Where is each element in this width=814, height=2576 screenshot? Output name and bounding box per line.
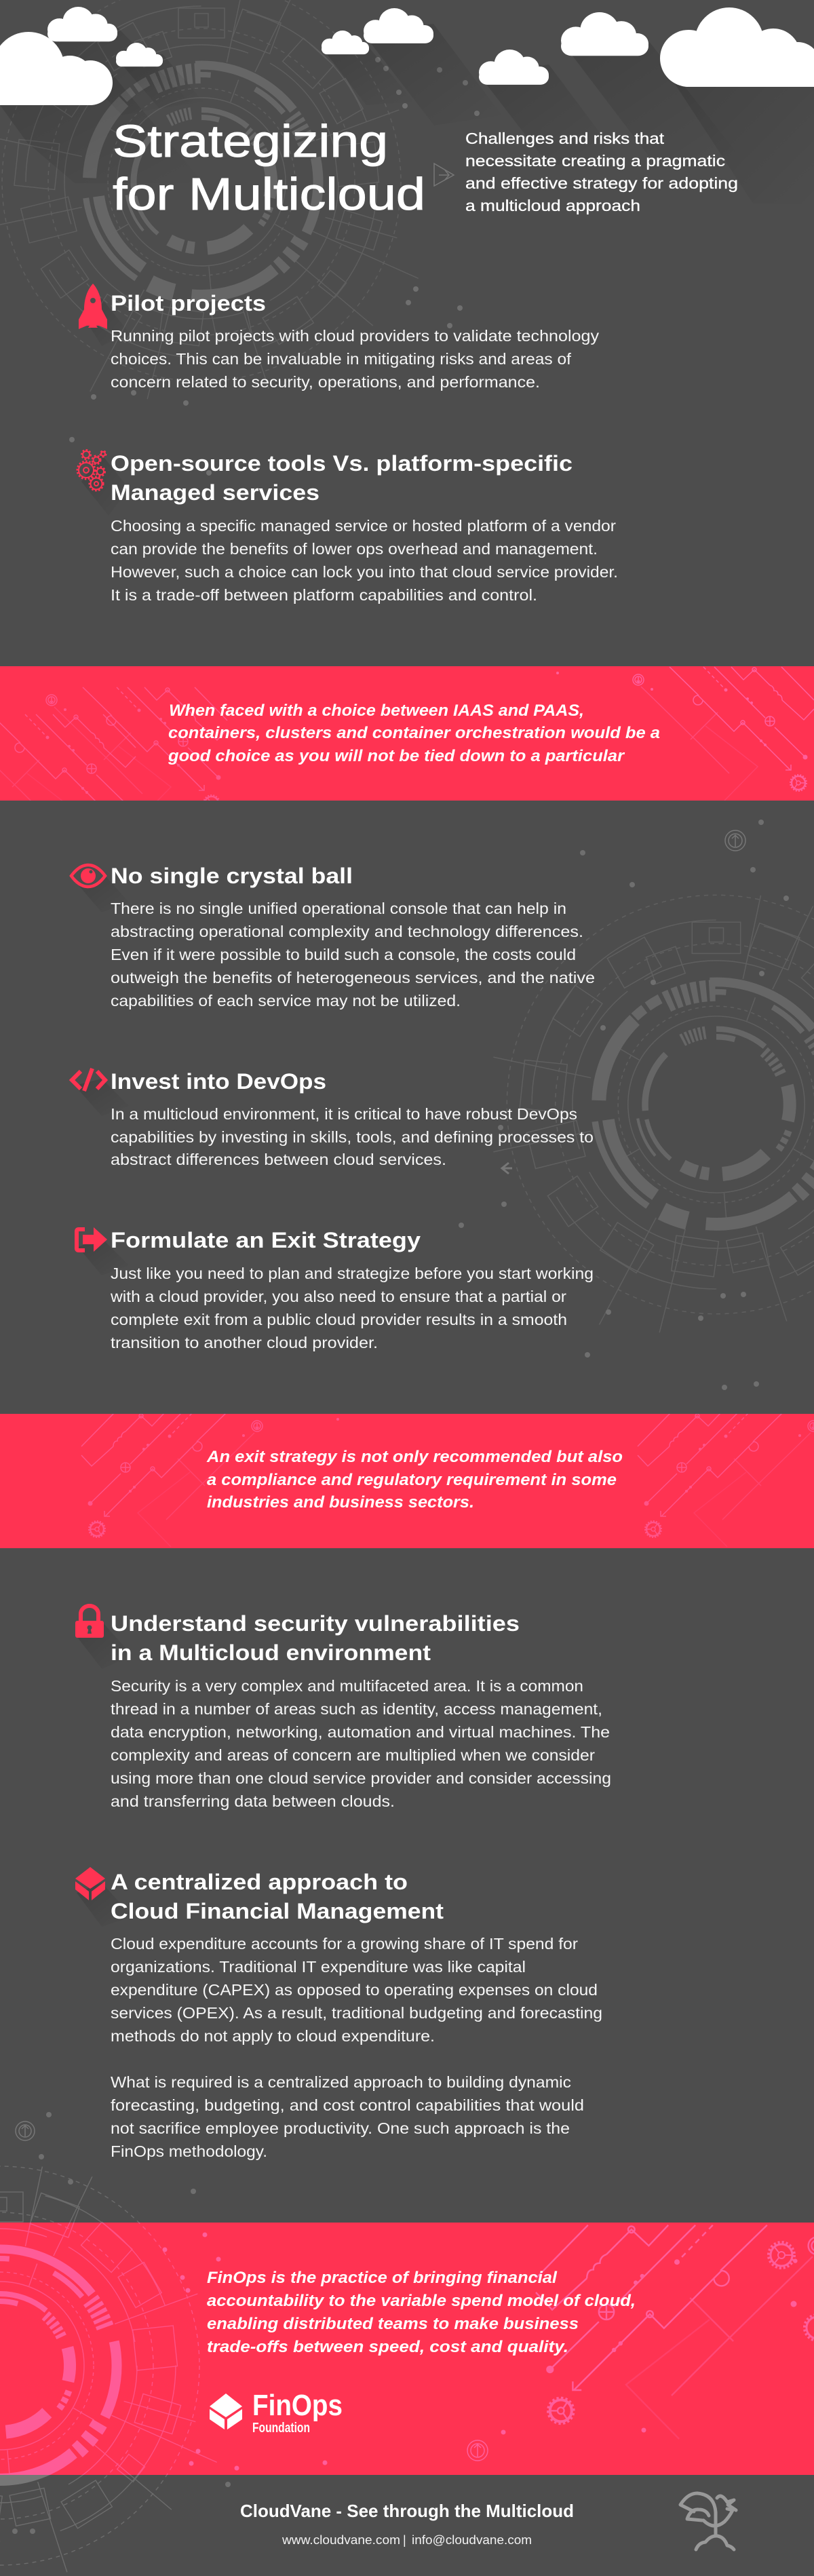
text: cloud financial body: forecasting, budgeting, and cost control capabilities that would (111, 2096, 584, 2114)
subtitle: Challenges and risks that (465, 130, 665, 147)
cloud: small left (116, 43, 163, 66)
icon: eye (71, 865, 129, 912)
background dial: bottom left (0, 2166, 217, 2576)
footer contact line: | (403, 2533, 406, 2547)
banner dots and gears (163, 2232, 814, 2471)
icon: code brackets (72, 1069, 129, 1116)
heading: open-source tools: Open-source tools Vs. platform-specific (111, 451, 573, 476)
text: security body: complexity and areas of concern are multiplied when we consider (111, 1746, 595, 1764)
section: exit strategy (77, 1227, 594, 1351)
cloud long shadows (0, 24, 814, 204)
section: devops (72, 1069, 594, 1168)
title: Strategizing (113, 116, 388, 167)
heading: security: in a Multicloud environment (111, 1640, 431, 1665)
background dial: middle right (493, 895, 814, 1332)
cloud: top left (47, 7, 117, 41)
text: crystal ball body: Even if it were possible to build such a console, the costs could (111, 946, 576, 963)
cloud: small centre (322, 31, 369, 54)
footer contact line (282, 2533, 532, 2547)
background dial: top left (0, 0, 419, 399)
cloud: large left (0, 32, 113, 105)
text: crystal ball body: outweigh the benefits of heterogeneous services, and the native (111, 969, 595, 986)
footer (240, 2493, 736, 2550)
heading: open-source tools: Managed services (111, 480, 319, 505)
text: exit strategy body: complete exit from a public cloud provider results in a smooth (111, 1311, 567, 1328)
callout text: industries and business sectors. (207, 1493, 474, 1512)
cloud: lower right of centre (479, 50, 549, 85)
text: exit strategy body: with a cloud provider, you also need to ensure that a partial or (110, 1288, 566, 1305)
subtitle: a multicloud approach (465, 197, 640, 214)
subtitle: and effective strategy for adopting (465, 174, 738, 192)
section: open-source tools (77, 450, 618, 604)
text: devops body: capabilities by investing in skills, tools, and defining processes to (111, 1128, 594, 1146)
logo tagline: Foundation (252, 2421, 310, 2436)
text: crystal ball body: capabilities of each service may not be utilized. (111, 992, 461, 1010)
heading: cloud financial management: A centralized approach to (111, 1870, 408, 1894)
section: crystal ball (71, 864, 595, 1010)
text: devops body (111, 1105, 594, 1168)
text: cloud financial body: Cloud expenditure accounts for a growing share of IT spend for (111, 1935, 578, 1953)
banner: FinOps definition (0, 2223, 814, 2475)
text: crystal ball body: abstracting operational complexity and technology differences. (111, 923, 583, 940)
dial on banner (0, 2223, 217, 2475)
text: cloud financial body: services (OPEX). As a result, traditional budgeting and forecasting (111, 2004, 602, 2022)
icon: padlock (75, 1606, 132, 1669)
cloud: upper centre (364, 8, 433, 43)
heading: security: Understand security vulnerabilities (111, 1611, 520, 1636)
section: pilot projects (79, 284, 600, 391)
text: security body (111, 1677, 611, 1810)
text: security body: data encryption, networking, automation and virtual machines. The (111, 1723, 610, 1741)
cloud: right of centre (561, 12, 648, 56)
icon: FinOps cube (210, 2394, 242, 2429)
heading: cloud financial management: Cloud Financial Management (111, 1899, 444, 1923)
icon: cube (75, 1867, 132, 1927)
text: cloud financial body: not sacrifice employee productivity. One such approach is the (111, 2119, 570, 2137)
section: cloud financial management (75, 1867, 602, 2160)
text: cloud financial body: methods do not apply to cloud expenditure. (111, 2027, 435, 2045)
footer title: CloudVane - See through the Multicloud (240, 2501, 574, 2521)
text: pilot projects body (111, 327, 600, 391)
banner: compliance (0, 1413, 814, 1548)
text: cloud financial body: organizations. Traditional IT expenditure was like capital (111, 1958, 526, 1976)
icon: rooster weathervane logo (680, 2493, 736, 2550)
text: pilot projects body: Running pilot projects with cloud providers to validate technology (111, 327, 600, 345)
callout text: enabling distributed teams to make business (207, 2315, 579, 2333)
text: security body: and transferring data between clouds. (111, 1792, 395, 1810)
text: crystal ball body (111, 900, 595, 1010)
callout text: trade-offs between speed, cost and quality. (207, 2338, 568, 2356)
text: pilot projects body: concern related to security, operations, and performance. (111, 373, 540, 391)
footer contact line: www.cloudvane.com (282, 2533, 400, 2547)
subtitle (465, 130, 738, 214)
icon: gears (77, 450, 129, 516)
circuit pattern: banner one (0, 667, 814, 848)
subtitle: necessitate creating a pragmatic (465, 152, 725, 170)
circuit pattern: banner two (81, 1413, 814, 1547)
text: open-source tools body: However, such a choice can lock you into that cloud service provider. (111, 563, 618, 581)
icon: rocket (79, 284, 129, 346)
title (113, 116, 425, 220)
text: open-source tools body (111, 517, 618, 604)
heading: cloud financial management (111, 1870, 444, 1923)
heading: open-source tools (111, 451, 573, 505)
heading: pilot projects: Pilot projects (111, 291, 266, 315)
icon: exit arrow (77, 1227, 129, 1275)
heading: exit strategy: Formulate an Exit Strategy (111, 1228, 421, 1252)
text: security body: using more than one cloud service provider and consider accessing (111, 1769, 611, 1787)
section: security (75, 1606, 611, 1810)
callout text: When faced with a choice between IAAS and PAAS, (169, 701, 584, 720)
heading: devops: Invest into DevOps (111, 1069, 326, 1094)
text: devops body: In a multicloud environment, it is critical to have robust DevOps (111, 1105, 577, 1123)
text: cloud financial body: FinOps methodology. (111, 2142, 267, 2160)
text: cloud financial body: What is required is a centralized approach to building dynamic (111, 2073, 571, 2091)
callout text: FinOps is the practice of bringing financial (207, 2269, 558, 2287)
text: exit strategy body: Just like you need to plan and strategize before you start working (111, 1265, 594, 1282)
text: exit strategy body (110, 1265, 594, 1351)
banner: IAAS and PAAS (0, 666, 814, 801)
text: pilot projects body: choices. This can be invaluable in mitigating risks and areas of (111, 350, 572, 368)
title: for Multicloud (113, 169, 425, 220)
logo wordmark: FinOps (252, 2389, 343, 2422)
text: open-source tools body: Choosing a specific managed service or hosted platform of a vendor (111, 517, 616, 535)
text: open-source tools body: It is a trade-off between platform capabilities and control. (111, 586, 537, 604)
callout text: An exit strategy is not only recommended but also (206, 1448, 623, 1466)
callout text (206, 1448, 623, 1512)
callout text: good choice as you will not be tied down to a particular (168, 747, 625, 765)
text: security body: thread in a number of areas such as identity, access management, (111, 1700, 602, 1718)
text: open-source tools body: can provide the benefits of lower ops overhead and management. (111, 540, 598, 558)
circuit pattern: banner three (536, 2225, 814, 2439)
FinOps Foundation logo (210, 2389, 343, 2436)
callout text (207, 2269, 636, 2356)
text: cloud financial body (111, 1935, 602, 2160)
heading: crystal ball: No single crystal ball (111, 864, 353, 888)
footer contact line: info@cloudvane.com (412, 2533, 532, 2547)
clouds (0, 7, 814, 105)
text: crystal ball body: There is no single unified operational console that can help in (111, 900, 566, 917)
text: exit strategy body: transition to another cloud provider. (111, 1334, 378, 1351)
text: security body: Security is a very complex and multifaceted area. It is a common (111, 1677, 583, 1695)
callout text (168, 701, 660, 765)
callout text: containers, clusters and container orchestration would be a (168, 724, 660, 742)
callout text: accountability to the variable spend model of cloud, (207, 2292, 636, 2310)
cloud: large right (660, 7, 814, 87)
text: cloud financial body: expenditure (CAPEX) as opposed to operating expenses on cloud (111, 1981, 598, 1999)
heading: security (111, 1611, 520, 1665)
callout text: a compliance and regulatory requirement in some (207, 1471, 617, 1489)
text: devops body: abstract differences between cloud services. (111, 1151, 446, 1168)
